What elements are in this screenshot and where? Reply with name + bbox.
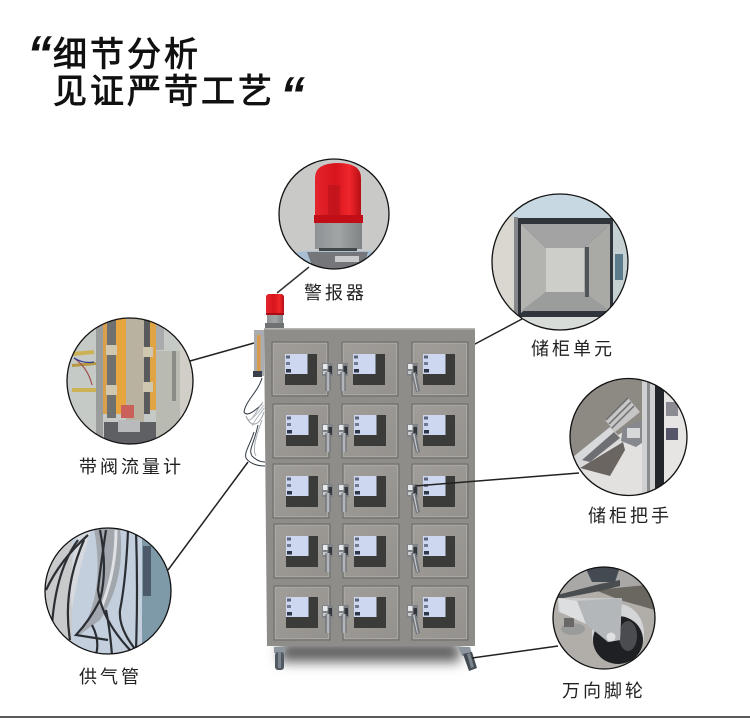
black door seal bbox=[655, 386, 664, 488]
handle ribbed grip bbox=[605, 398, 640, 432]
leader line: handle bbox=[415, 473, 579, 486]
unit left wall bbox=[492, 217, 514, 310]
small flow meter bbox=[253, 330, 264, 377]
cabinet top edge bbox=[264, 328, 475, 330]
black cables bbox=[46, 530, 140, 655]
alarm red dome bbox=[315, 163, 361, 215]
translucent tube bundle bbox=[78, 528, 121, 636]
locker windows with screens bbox=[285, 354, 455, 628]
meter fittings bbox=[106, 345, 117, 355]
callout photo: storage unit bbox=[492, 194, 628, 330]
label: alarm: 警报器 bbox=[304, 283, 367, 303]
handle grey background bbox=[570, 379, 642, 456]
label: gas pipes: 供气管 bbox=[79, 667, 142, 687]
label: storage unit: 储柜单元 bbox=[531, 339, 615, 359]
callout photo: alarm bbox=[279, 159, 389, 271]
cabinet bbox=[264, 328, 477, 671]
meter yellow tube bbox=[116, 318, 126, 414]
blue strip bbox=[142, 538, 170, 644]
bottom rule bbox=[0, 716, 750, 718]
small alarm on cabinet bbox=[265, 294, 284, 328]
vertical strip bbox=[642, 378, 655, 496]
locker handles bbox=[322, 363, 420, 634]
label: caster: 万向脚轮 bbox=[562, 681, 646, 701]
leader line: flow meter bbox=[190, 343, 254, 361]
label: handle: 储柜把手 bbox=[588, 506, 672, 526]
closing quote: “ bbox=[280, 67, 305, 123]
unit right outside bbox=[613, 221, 628, 303]
right panel and labels bbox=[664, 378, 690, 496]
unit interior bbox=[518, 218, 613, 317]
lockers grid bbox=[272, 342, 468, 640]
callout photo: caster bbox=[553, 567, 655, 669]
opening quote: “ bbox=[27, 26, 52, 82]
meter rods bbox=[72, 350, 94, 356]
alarm steel plate bbox=[296, 251, 372, 263]
left caster bbox=[274, 647, 285, 670]
handle lower shadow plate bbox=[580, 442, 625, 476]
caster bracket bbox=[558, 598, 622, 642]
title line 2: 见证严苛工艺 bbox=[53, 73, 275, 111]
leader line: caster bbox=[472, 646, 558, 658]
title bbox=[27, 26, 305, 123]
callout photo: flow meter bbox=[67, 318, 194, 444]
cabinet body bbox=[264, 328, 475, 646]
leader line: storage unit bbox=[460, 319, 522, 352]
handle latch bbox=[621, 422, 642, 447]
gas pipe bundle bbox=[244, 378, 265, 466]
alarm grey base bbox=[315, 223, 362, 249]
leader line: alarm bbox=[277, 267, 309, 293]
title line 1: 细节分析 bbox=[53, 36, 201, 74]
callout photo: handle bbox=[570, 378, 690, 496]
meter float bbox=[121, 405, 134, 418]
leader line: gas pipe bbox=[168, 462, 248, 570]
caster foot bbox=[561, 623, 585, 635]
meter posts bbox=[96, 325, 103, 437]
callout photo: gas pipes bbox=[45, 528, 172, 655]
right caster bbox=[458, 647, 477, 671]
meter base bbox=[104, 422, 156, 444]
handle chrome bar bbox=[573, 427, 623, 467]
cabinet shadow bbox=[280, 642, 460, 662]
caster wheel bbox=[592, 604, 644, 664]
meter right panel bbox=[156, 351, 180, 444]
label: flow meter: 带阀流量计 bbox=[79, 457, 184, 477]
